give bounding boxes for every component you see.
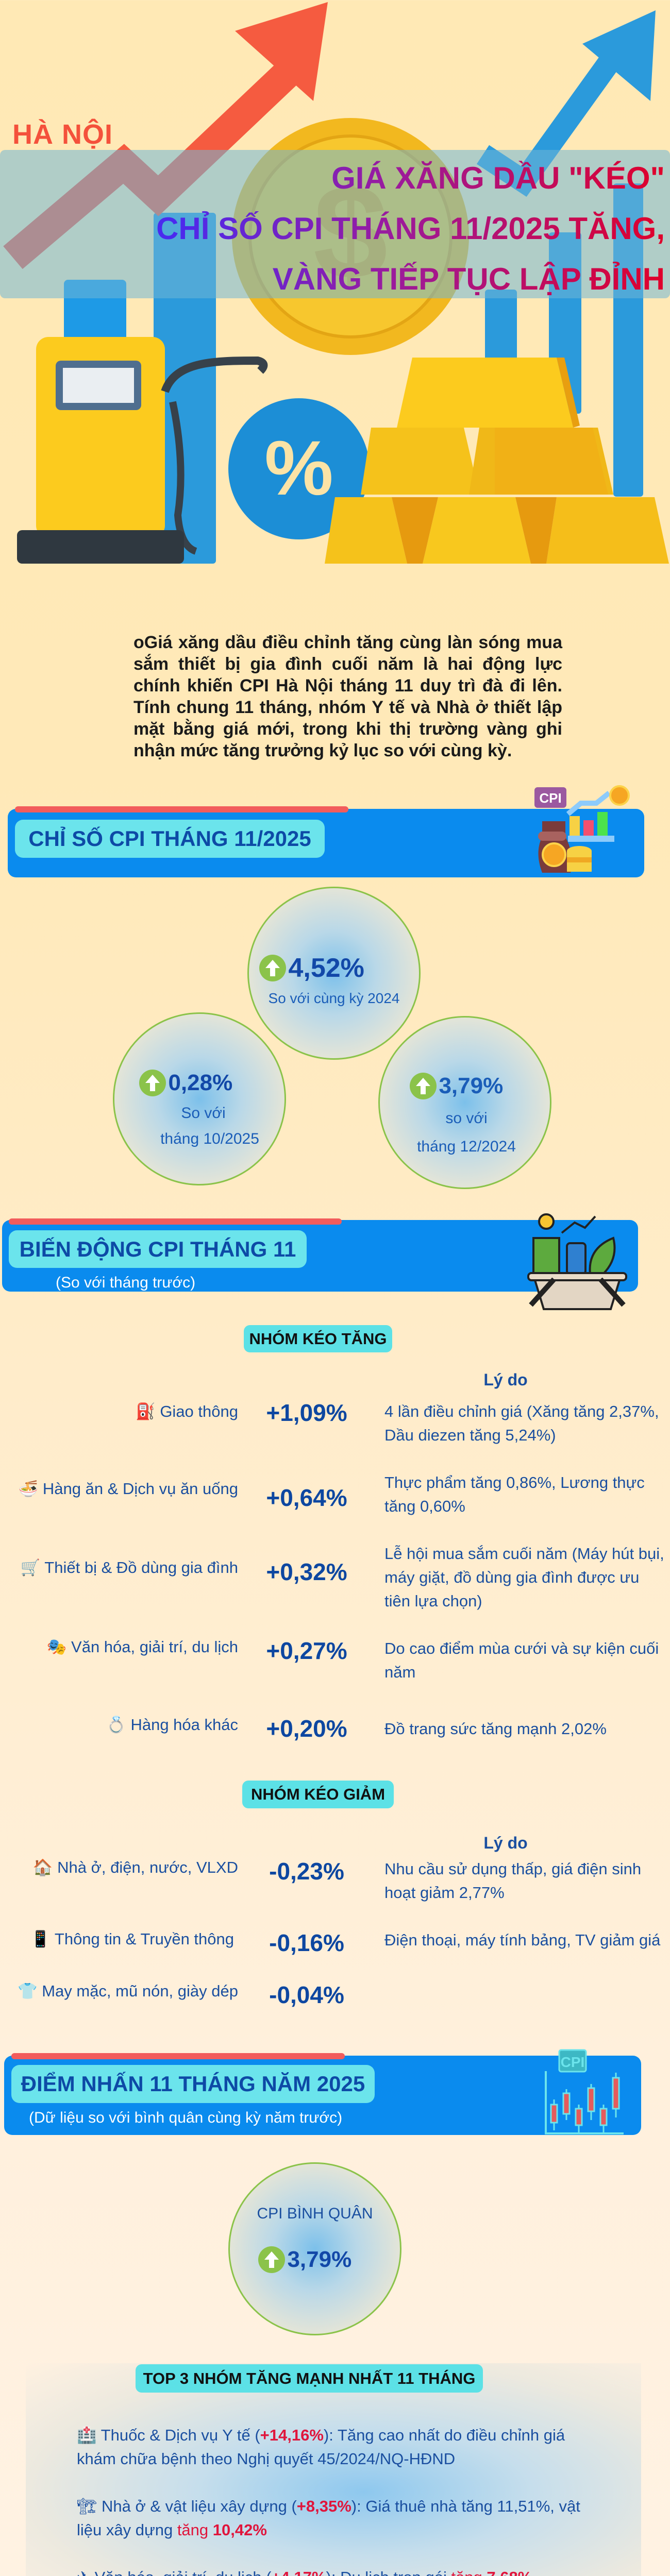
row: may mặc <box>18 1981 344 2008</box>
row: may mặc: 👕 May mặc, mũ nón, giày dép <box>18 1982 238 2000</box>
row: thông tin: Điện thoại, máy tính bảng, TV giảm giá <box>384 1931 660 1949</box>
circle: 3,79% so với tháng 12/2024: so với <box>445 1110 488 1127</box>
title block: CHỈ SỐ CPI THÁNG 11/2025 TĂNG, <box>156 211 665 246</box>
circle: CPI bình quân: CPI BÌNH QUÂN <box>257 2205 373 2222</box>
icon: gold coin <box>232 118 469 355</box>
table: nhóm kéo giảm <box>18 1834 661 2008</box>
row: hàng hóa khác: Đồ trang sức tăng mạnh 2,02% <box>384 1720 607 1738</box>
row: giao thông: 4 lần điều chỉnh giá (Xăng tăng 2,37%, Dầu diezen tăng 5,24%) <box>384 1402 659 1444</box>
title block: GIÁ XĂNG DẦU "KÉO" <box>331 161 665 195</box>
circle: 0,28% so với tháng 10/2025: So với <box>181 1105 226 1122</box>
row: thông tin <box>30 1929 661 1956</box>
row: văn hóa: Do cao điểm mùa cưới và sự kiện cuối năm <box>384 1639 659 1681</box>
row: thiết bị: 🛒 Thiết bị & Đồ dùng gia đình <box>21 1558 238 1577</box>
row: thiết bị <box>21 1545 664 1610</box>
row: nhà ở: 🏠 Nhà ở, điện, nước, VLXD <box>33 1858 238 1876</box>
tag: top 3: TOP 3 NHÓM TĂNG MẠNH NHẤT 11 THÁNG <box>143 2369 475 2387</box>
icon: gold coin: $ <box>313 158 388 307</box>
tag: top 3 <box>136 2364 483 2393</box>
section header: Điểm nhấn 11 tháng <box>4 2049 641 2135</box>
circle: 3,79% so với tháng 12/2024 <box>378 1016 551 1189</box>
row: thiết bị: Lễ hội mua sắm cuối năm (Máy hút bụi, máy giặt, đồ dùng gia đình được ưu tiên lựa chọn) <box>384 1545 664 1610</box>
section header: Biến động CPI tháng 11: (So với tháng trước) <box>56 1274 195 1291</box>
row: văn hóa <box>47 1637 659 1681</box>
circle: 4,52% so với cùng kỳ: 4,52% <box>288 953 364 983</box>
hero illustration <box>0 2 670 564</box>
row: văn hóa: +0,27% <box>266 1637 347 1664</box>
row: hàng ăn <box>19 1473 645 1515</box>
tag: nhóm kéo giảm: NHÓM KÉO GIẢM <box>251 1785 385 1803</box>
row: thiết bị: +0,32% <box>266 1558 347 1585</box>
tag: nhóm kéo tăng <box>244 1325 392 1352</box>
icon: money bag and cpi chart: CPI <box>539 790 562 806</box>
row: nhà ở <box>33 1858 641 1902</box>
title: HÀ NỘI: HÀ NỘI <box>12 119 113 150</box>
section header: CPI tháng 11/2025 <box>8 785 644 877</box>
section header: CPI tháng 11/2025: CHỈ SỐ CPI THÁNG 11/2025 <box>28 826 311 851</box>
row: hàng hóa khác: +0,20% <box>266 1715 347 1742</box>
row: giao thông: +1,09% <box>266 1399 347 1426</box>
icon: red up arrow <box>13 2 328 258</box>
circle: 4,52% so với cùng kỳ: So với cùng kỳ 2024 <box>269 990 399 1006</box>
row: may mặc: -0,04% <box>269 1981 344 2008</box>
item: nhà ở: 🏗 Nhà ở & vật liệu xây dựng (+8,35%): Giá thuê nhà tăng 11,51%, vật liệu xây dựng tăng 10,42% <box>77 2497 580 2539</box>
section header: Biến động CPI tháng 11: BIẾN ĐỘNG CPI THÁNG 11 <box>20 1236 296 1261</box>
section header: Điểm nhấn 11 tháng: ĐIỂM NHẤN 11 THÁNG NĂM 2025 <box>21 2072 365 2096</box>
tag: nhóm kéo giảm <box>242 1781 394 1808</box>
row: giao thông: ⛽ Giao thông <box>136 1402 238 1420</box>
icon: fuel pump <box>17 280 263 564</box>
circle: 0,28% so với tháng 10/2025: tháng 10/2025 <box>160 1130 259 1147</box>
icon: percent circle <box>228 398 370 539</box>
item: y tế: 🏥 Thuốc & Dịch vụ Y tế (+14,16%): Tăng cao nhất do điều chỉnh giá khám chữa bệnh theo Nghị quyết 45/2024/NQ-HĐND <box>77 2426 565 2468</box>
tag: nhóm kéo tăng: NHÓM KÉO TĂNG <box>249 1329 387 1348</box>
row: nhà ở: -0,23% <box>269 1858 344 1885</box>
section header: Điểm nhấn 11 tháng: (Dữ liệu so với bình quân cùng kỳ năm trước) <box>29 2109 342 2126</box>
icon: shopping basket <box>527 1213 627 1310</box>
table: nhóm kéo giảm: Lý do <box>483 1834 528 1852</box>
icon: money bag and cpi chart <box>534 785 630 873</box>
icon: percent circle: % <box>264 425 333 511</box>
row: hàng ăn: 🍜 Hàng ăn & Dịch vụ ăn uống <box>19 1480 238 1498</box>
translucent title band <box>0 150 670 298</box>
row: hàng hóa khác: 💍 Hàng hóa khác <box>106 1716 238 1734</box>
circle: CPI bình quân <box>228 2162 401 2335</box>
circle: 0,28% so với tháng 10/2025 <box>113 1012 286 1185</box>
section header: Biến động CPI tháng 11 <box>2 1213 638 1310</box>
row: thông tin: -0,16% <box>269 1929 344 1956</box>
panel: top 3 nhóm tăng mạnh <box>26 2363 641 2576</box>
icon: CPI candlestick chart <box>545 2049 624 2134</box>
intro paragraph: oGiá xăng dầu điều chỉnh tăng cùng làn sóng mua sắm thiết bị gia đình cuối năm là hai động lực chính khiến CPI Hà Nội tháng 11 duy trì đà đi lên. Tính chung 11 tháng, nhóm Y tế và Nhà ở thiết lập mặt bằng giá mới, trong khi thị trường vàng ghi nhận mức tăng trưởng kỷ lục so với cùng kỳ. <box>133 633 562 760</box>
title block: VÀNG TIẾP TỤC LẬP ĐỈNH <box>273 262 665 296</box>
row: hàng ăn: +0,64% <box>266 1484 347 1511</box>
circle: 0,28% so với tháng 10/2025: 0,28% <box>168 1070 232 1095</box>
circle: 4,52% so với cùng kỳ <box>247 887 421 1060</box>
icon: CPI candlestick chart: CPI <box>561 2054 584 2070</box>
row: hàng ăn: Thực phẩm tăng 0,86%, Lương thực tăng 0,60% <box>384 1473 645 1515</box>
row: hàng hóa khác <box>106 1715 607 1742</box>
row: thông tin: 📱 Thông tin & Truyền thông <box>30 1930 234 1948</box>
circle: CPI bình quân: 3,79% <box>287 2247 351 2272</box>
row: văn hóa: 🎭 Văn hóa, giải trí, du lịch <box>47 1638 238 1656</box>
table: nhóm kéo tăng: Lý do <box>483 1370 528 1389</box>
icon: gold bars stack <box>325 358 669 564</box>
row: nhà ở: Nhu cầu sử dụng thấp, giá điện sinh hoạt giảm 2,77% <box>384 1860 641 1902</box>
circle: 3,79% so với tháng 12/2024: 3,79% <box>439 1073 503 1098</box>
icon: blue up arrow <box>483 10 656 181</box>
title block <box>156 161 665 296</box>
row: giao thông <box>136 1399 659 1444</box>
circle: 3,79% so với tháng 12/2024: tháng 12/2024 <box>417 1138 516 1155</box>
table: nhóm kéo tăng <box>19 1370 664 1742</box>
blue bars background <box>154 183 643 564</box>
